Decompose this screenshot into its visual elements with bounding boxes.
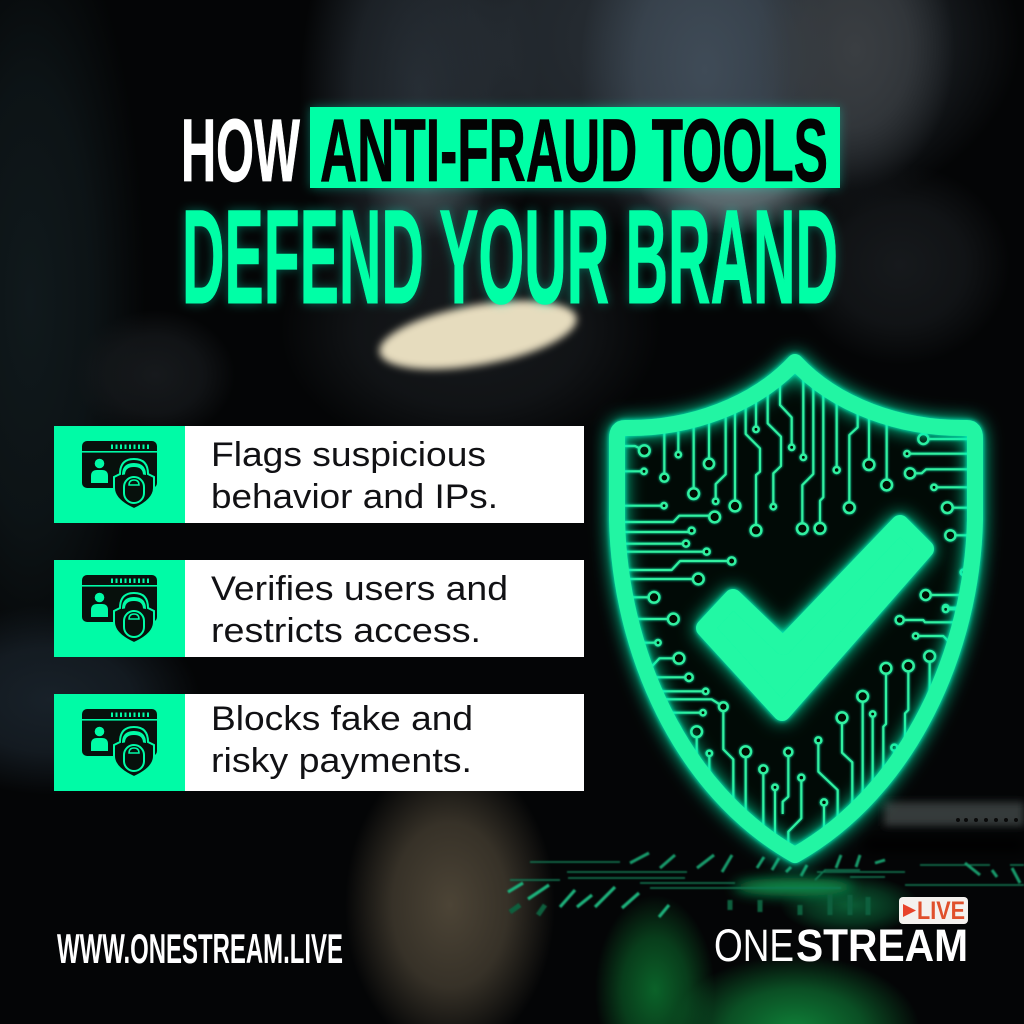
live badge: LIVE <box>917 897 965 925</box>
laptop dots <box>956 818 1018 822</box>
text: flags: Flags suspicious <box>211 436 486 474</box>
text: flags: behavior and IPs. <box>211 478 498 516</box>
live badge <box>899 897 968 925</box>
title word: HOW: HOW <box>181 100 300 200</box>
circuit traces bottom <box>630 607 965 848</box>
shield interior <box>617 362 975 855</box>
text: verifies: Verifies users and <box>211 570 508 608</box>
check mark <box>705 524 925 712</box>
wordmark: ONE <box>714 920 794 971</box>
icon: glowing circuit shield with check mark <box>617 362 975 855</box>
icon: id card and padlock shield <box>82 575 157 643</box>
website url: WWW.ONESTREAM.LIVE <box>57 925 343 972</box>
text: verifies: restricts access. <box>211 612 481 650</box>
panel: verifies users <box>54 560 584 657</box>
wordmark: STREAM <box>796 920 968 971</box>
circuit board on desk <box>508 853 1024 917</box>
logo: OneStream Live <box>714 897 968 971</box>
panel: blocks fake payments <box>54 694 584 791</box>
title <box>181 100 840 332</box>
text: blocks: risky payments. <box>211 742 472 780</box>
icon: id card and padlock shield <box>82 441 157 509</box>
title highlight bar <box>310 107 840 188</box>
lamp highlight <box>374 288 582 382</box>
shield outline <box>617 362 975 855</box>
icon: id card and padlock shield <box>82 709 157 777</box>
circuit traces top and sides <box>625 375 968 610</box>
panel: flags suspicious behavior <box>54 426 584 523</box>
text: blocks: Blocks fake and <box>211 700 473 738</box>
